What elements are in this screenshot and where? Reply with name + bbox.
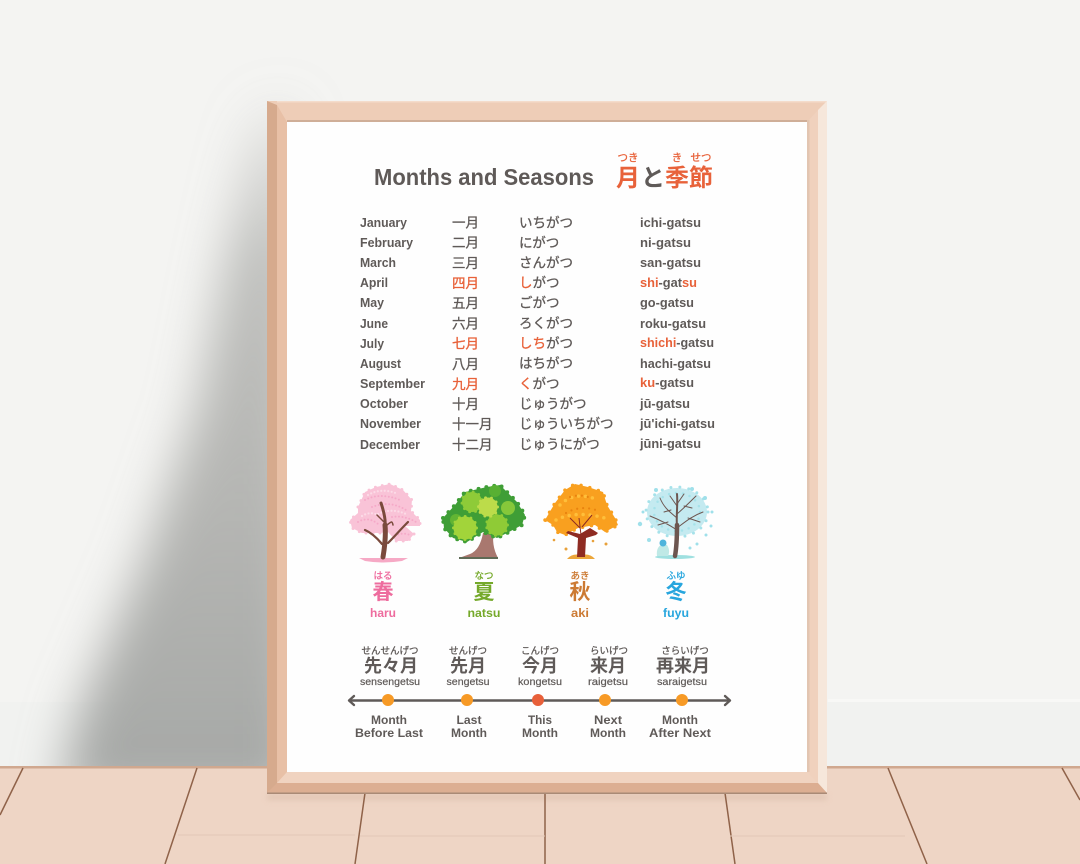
arrow: timeline xyxy=(349,696,730,705)
kanji month names: 六月 xyxy=(452,312,479,332)
icon: spring cherry tree xyxy=(350,484,420,562)
season label: winter xyxy=(663,568,689,620)
next month xyxy=(588,643,628,740)
season label: winter: 冬 xyxy=(666,576,686,606)
English month names: December xyxy=(360,438,420,452)
month before last: Month xyxy=(371,713,407,727)
season label: winter: fuyu xyxy=(663,606,689,620)
month before last: 先々月 xyxy=(364,652,418,678)
title: と xyxy=(641,158,665,193)
this month xyxy=(518,643,562,740)
season label: spring xyxy=(370,568,396,620)
romaji readings: shichi-gatsu xyxy=(640,336,714,350)
seasons section xyxy=(350,484,714,620)
season label: summer: natsu xyxy=(468,606,500,620)
season label: spring: haru xyxy=(370,606,396,620)
English month names: November xyxy=(360,417,421,431)
poster frame xyxy=(267,101,827,794)
romaji readings: go-gatsu xyxy=(640,296,694,310)
hiragana readings: しちがつ xyxy=(519,332,573,352)
next month: raigetsu xyxy=(588,677,628,688)
romaji readings: jū'ichi-gatsu xyxy=(639,417,715,431)
romaji readings: jū-gatsu xyxy=(639,397,690,411)
title: せつ xyxy=(690,150,712,165)
hiragana readings xyxy=(519,212,614,453)
next month: 来月 xyxy=(590,652,626,678)
month before last: せんせんげつ xyxy=(361,643,419,657)
season label: summer: なつ xyxy=(474,568,494,582)
this month: This xyxy=(528,713,552,727)
months table xyxy=(360,212,715,454)
kanji month names: 四月 xyxy=(452,272,479,292)
kanji month names: 十一月 xyxy=(452,413,492,433)
kanji month names: 七月 xyxy=(452,332,479,352)
month after next: さらいげつ xyxy=(661,643,709,657)
English month names: July xyxy=(360,337,384,351)
romaji readings: jūni-gatsu xyxy=(639,437,701,451)
English month names: April xyxy=(360,276,388,290)
month before last: Before Last xyxy=(355,726,423,740)
English month names xyxy=(360,216,425,452)
English month names: August xyxy=(360,357,402,371)
this month: 今月 xyxy=(522,652,558,678)
romaji readings: san-gatsu xyxy=(640,256,701,270)
romaji readings: hachi-gatsu xyxy=(640,357,711,371)
timeline dots xyxy=(382,694,688,706)
season label: spring: はる xyxy=(373,568,393,582)
last month xyxy=(446,643,490,740)
romaji readings: ku-gatsu xyxy=(640,376,694,390)
next month: Next xyxy=(594,713,622,727)
hiragana readings: くがつ xyxy=(519,372,560,392)
season label: autumn: 秋 xyxy=(570,576,590,606)
hiragana readings: じゅうがつ xyxy=(519,392,586,412)
hiragana readings: じゅうにがつ xyxy=(519,433,600,453)
month after next: Month xyxy=(662,713,698,727)
relative months timeline xyxy=(349,643,730,740)
English month names: March xyxy=(360,256,396,270)
kanji month names: 十二月 xyxy=(452,434,492,454)
this month: Month xyxy=(522,726,558,740)
month after next: saraigetsu xyxy=(657,677,707,688)
room background: wall xyxy=(34,118,267,766)
wooden floor xyxy=(0,766,1080,864)
title: き xyxy=(672,150,682,165)
hiragana readings: さんがつ xyxy=(519,252,573,272)
kanji month names: 九月 xyxy=(452,373,479,393)
icon: winter snowy tree xyxy=(638,487,714,559)
kanji month names: 十月 xyxy=(452,393,479,413)
kanji month names: 一月 xyxy=(452,212,479,232)
month before last: sensengetsu xyxy=(360,677,420,688)
English month names: June xyxy=(360,317,388,331)
English month names: February xyxy=(360,236,413,250)
hiragana readings: にがつ xyxy=(519,232,559,252)
kanji month names: 三月 xyxy=(452,252,479,272)
title: つき xyxy=(618,150,638,165)
hiragana readings: いちがつ xyxy=(519,212,573,232)
this month: kongetsu xyxy=(518,677,562,688)
romaji readings: ni-gatsu xyxy=(640,236,691,250)
last month: 先月 xyxy=(450,652,486,678)
last month: せんげつ xyxy=(449,643,487,657)
title: 月 xyxy=(616,158,640,193)
icon: autumn orange tree xyxy=(545,484,618,559)
title: 季節 xyxy=(665,158,713,193)
season label: summer xyxy=(468,568,500,620)
English month names: September xyxy=(360,377,425,391)
kanji month names: 五月 xyxy=(452,292,479,312)
romaji readings: ichi-gatsu xyxy=(640,216,701,230)
month after next xyxy=(649,643,711,740)
title xyxy=(374,150,713,193)
month after next: 再来月 xyxy=(656,652,710,678)
poster paper xyxy=(287,122,807,772)
kanji month names xyxy=(452,212,492,454)
month after next: After Next xyxy=(649,726,711,740)
kanji month names: 八月 xyxy=(452,353,479,373)
season label: autumn: aki xyxy=(571,606,589,620)
this month: こんげつ xyxy=(521,643,559,657)
month before last xyxy=(355,643,423,740)
hiragana readings: じゅういちがつ xyxy=(519,412,614,432)
hiragana readings: ろくがつ xyxy=(519,312,573,332)
last month: Last xyxy=(456,713,482,727)
title: Months and Seasons xyxy=(374,164,594,190)
season label: winter: ふゆ xyxy=(666,568,686,582)
hiragana readings: しがつ xyxy=(519,272,560,292)
kanji month names: 二月 xyxy=(452,232,479,252)
season label: autumn: あき xyxy=(570,568,590,582)
hiragana readings: はちがつ xyxy=(519,352,573,372)
last month: Month xyxy=(451,726,487,740)
English month names: May xyxy=(360,296,384,310)
next month: らいげつ xyxy=(590,643,628,657)
season label: summer: 夏 xyxy=(474,576,494,606)
season label: spring: 春 xyxy=(372,576,394,606)
last month: sengetsu xyxy=(446,677,490,688)
romaji readings: roku-gatsu xyxy=(640,317,706,331)
icon: summer green tree xyxy=(443,485,525,558)
romaji readings xyxy=(639,216,715,451)
hiragana readings: ごがつ xyxy=(519,292,560,312)
English month names: January xyxy=(360,216,407,230)
English month names: October xyxy=(360,397,408,411)
romaji readings: shi-gatsu xyxy=(640,276,697,290)
season label: autumn xyxy=(570,568,590,620)
next month: Month xyxy=(590,726,626,740)
